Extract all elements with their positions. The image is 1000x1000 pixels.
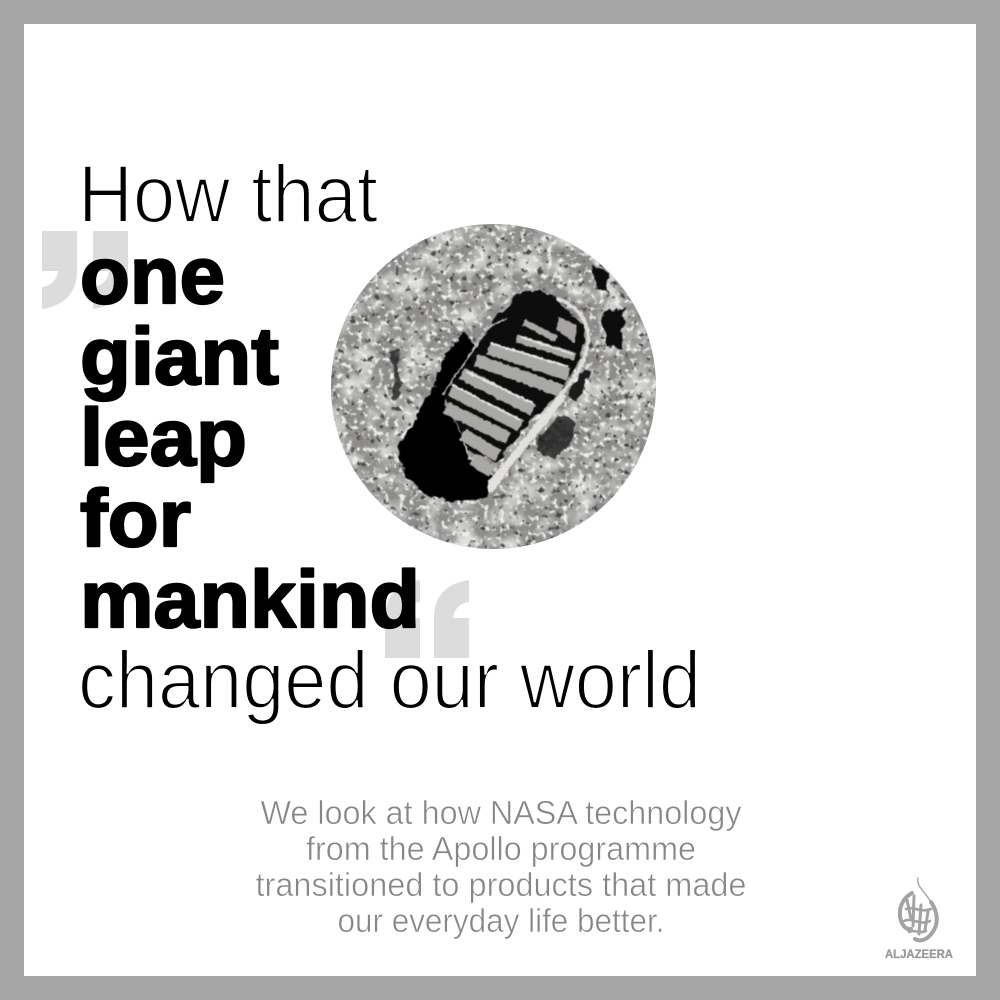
headline: How that <box>78 149 378 240</box>
headline: for <box>80 474 191 564</box>
headline: giant <box>80 312 279 402</box>
photo: bootprint on the lunar surface <box>331 224 656 549</box>
closing quotation mark <box>385 580 469 658</box>
headline: changed our world <box>78 635 701 726</box>
logo wordmark: ALJAZEERA <box>885 947 953 961</box>
subtitle <box>256 794 746 939</box>
headline <box>78 149 701 726</box>
headline: leap <box>80 393 247 483</box>
headline: mankind <box>80 555 420 645</box>
subtitle: our everyday life better. <box>338 902 664 939</box>
subtitle: transitioned to products that made <box>256 866 746 903</box>
subtitle: from the Apollo programme <box>306 830 696 867</box>
opening quotation mark <box>42 231 128 309</box>
logo mark <box>900 878 937 940</box>
headline: one <box>80 231 225 321</box>
logo: Al Jazeera <box>885 878 953 961</box>
subtitle: We look at how NASA technology <box>260 794 742 831</box>
